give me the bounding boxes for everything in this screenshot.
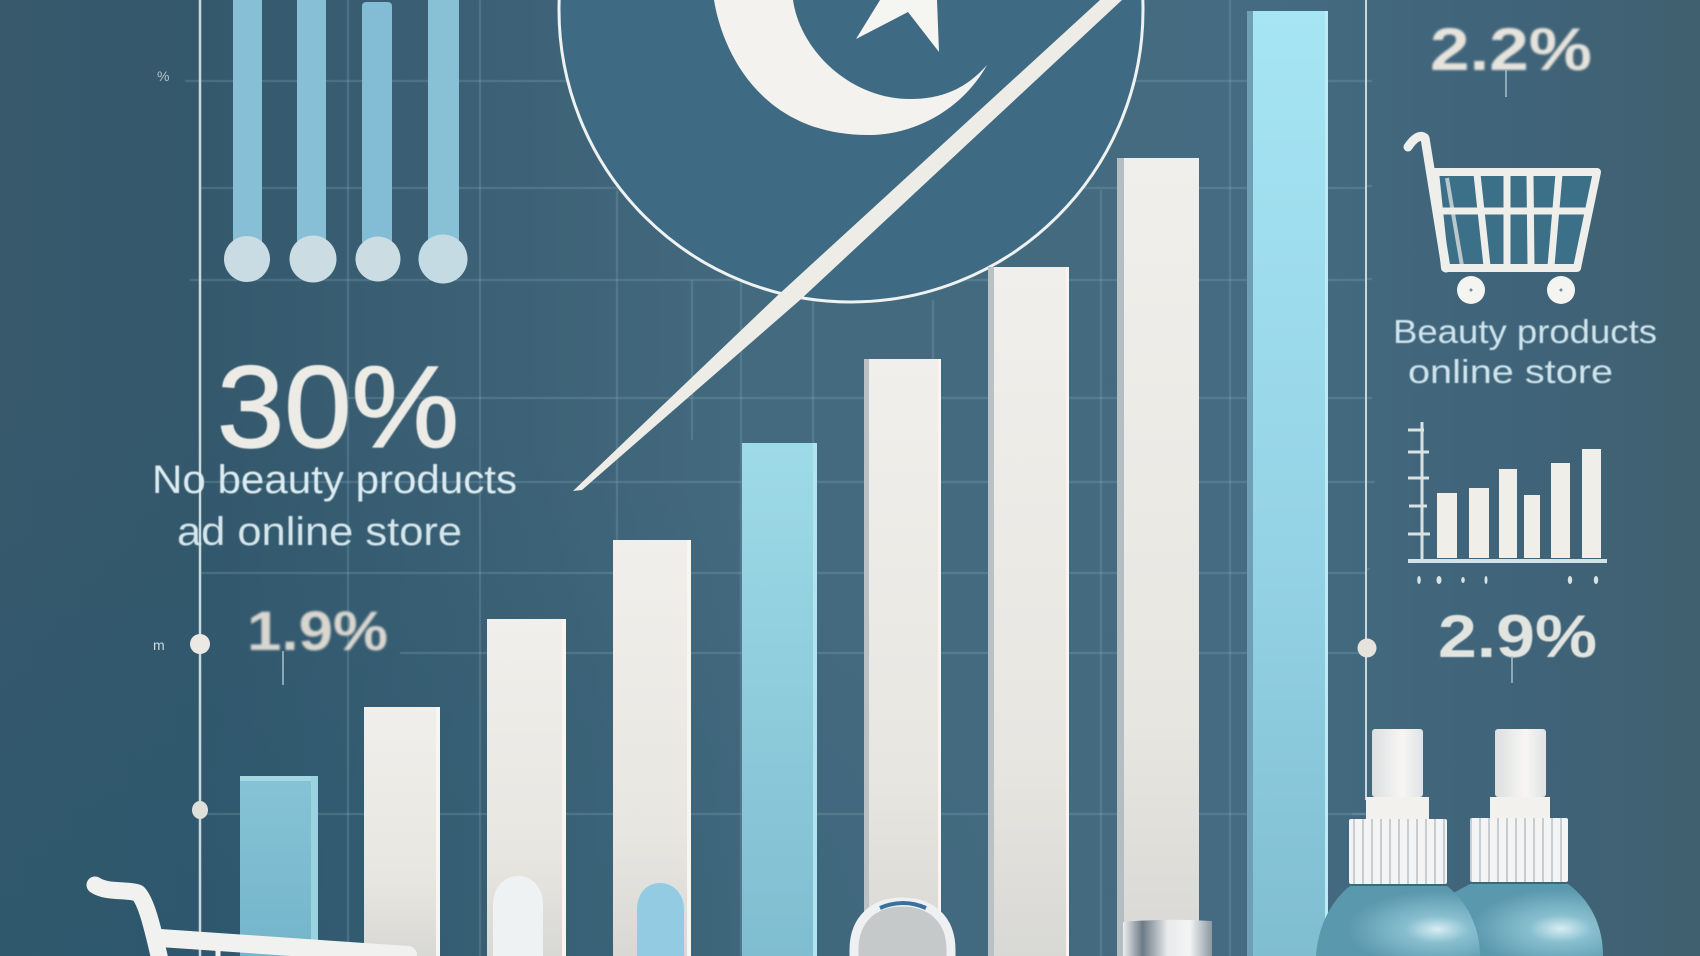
diagonal line xyxy=(573,0,1122,491)
mini chart baseline xyxy=(1408,559,1607,563)
stat value: 1.9% xyxy=(247,599,388,662)
chart grid lines xyxy=(185,0,1375,956)
bar 8 xyxy=(1117,158,1199,956)
stat tick xyxy=(282,651,284,685)
blue tube xyxy=(637,883,684,956)
axis marker dot lower left xyxy=(192,801,208,819)
bottle collar xyxy=(1490,797,1550,819)
stat caption: No beauty products xyxy=(152,458,517,502)
mini chart bars xyxy=(1437,449,1601,558)
axis marker dot upper left: m xyxy=(153,637,165,653)
pillar 4 xyxy=(418,0,468,284)
stat tick xyxy=(1505,70,1507,97)
bar 4 xyxy=(613,540,691,956)
stat caption second line: ad online store xyxy=(177,510,462,554)
cart label: online store xyxy=(1408,353,1613,390)
spray bottle right xyxy=(1440,729,1603,956)
pillar 1 xyxy=(224,0,270,282)
cart label: Beauty products xyxy=(1393,313,1657,350)
bar 2 xyxy=(364,707,440,956)
spray bottle left xyxy=(1316,729,1480,956)
stat tick xyxy=(1511,656,1513,683)
stat value: 2.9% xyxy=(1438,603,1597,670)
bottle ribbed cap xyxy=(1470,818,1568,882)
bar 9 xyxy=(1247,11,1328,956)
bar 1 xyxy=(240,776,318,956)
right vertical axis xyxy=(1365,0,1367,800)
chrome mirror ring xyxy=(854,902,951,956)
bottle ribbed cap xyxy=(1349,819,1447,884)
icon: shopping cart xyxy=(1408,136,1597,304)
bar 3 xyxy=(487,619,566,956)
chrome cylinder xyxy=(1123,920,1212,956)
bottle body xyxy=(1440,884,1603,956)
bottle collar xyxy=(1366,797,1429,819)
pillar 2 xyxy=(290,0,336,282)
axis marker dot upper left xyxy=(153,634,210,654)
bottle nozzle xyxy=(1372,729,1423,797)
mini bar chart xyxy=(1408,422,1607,584)
white tube xyxy=(493,876,543,956)
main rising bar chart xyxy=(240,11,1328,956)
shopping cart lower left xyxy=(95,885,408,956)
axis marker dot right xyxy=(1358,638,1376,658)
mini chart tick labels xyxy=(1417,576,1598,584)
callout: 30% xyxy=(152,342,517,554)
icon: crescent xyxy=(714,0,987,135)
stat value: 2.2% xyxy=(1430,16,1592,83)
bar 7 xyxy=(988,267,1069,956)
tiny axis label: % xyxy=(157,68,169,84)
emblem disc xyxy=(559,0,1143,302)
bottle body xyxy=(1316,886,1480,956)
pillar 3 xyxy=(356,2,400,282)
left vertical axis xyxy=(199,0,201,956)
top left pillar chart xyxy=(224,0,468,284)
mini chart axes xyxy=(1408,422,1430,561)
big stat: 30% xyxy=(217,342,459,472)
bar 5 xyxy=(742,443,817,956)
cart label xyxy=(1393,313,1657,390)
icon: star xyxy=(856,0,939,52)
bar 6 xyxy=(864,359,941,956)
bottle nozzle xyxy=(1495,729,1546,797)
circle emblem with crescent and star xyxy=(559,0,1143,302)
